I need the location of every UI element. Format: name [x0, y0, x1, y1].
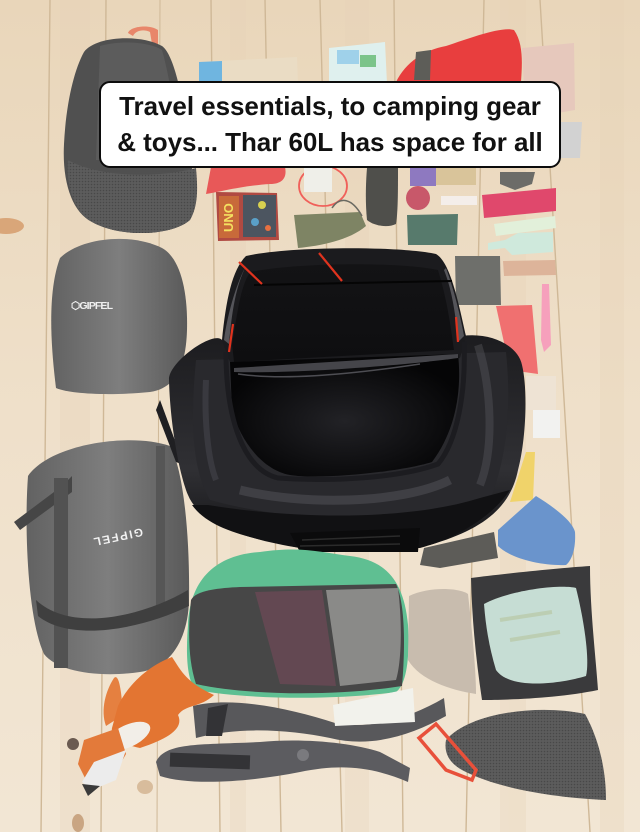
- item: carabiner: [500, 172, 535, 190]
- item: plush fox toy: [67, 657, 214, 796]
- item: green packing cube with clothes: [187, 549, 408, 698]
- item: pink pouch: [522, 43, 575, 115]
- item: upper shoulder strap: [193, 698, 446, 742]
- item: sunscreen tube: [482, 188, 556, 218]
- headline line one: Travel essentials, to camping gear: [119, 91, 541, 121]
- main duffel bag shell: [156, 248, 525, 552]
- logo: GIPFEL: GIPFEL: [92, 525, 144, 547]
- item: red dry bag: [396, 29, 522, 82]
- item: UNO card box: [216, 192, 279, 241]
- item: UNO card box: UNO: [221, 203, 236, 232]
- item: small box: [503, 260, 556, 276]
- open flap: [222, 248, 466, 368]
- logo: GIPFEL: ⬡GIPFEL: [71, 300, 114, 312]
- item: silver tin: [558, 122, 582, 158]
- item: beige pouch: [408, 589, 476, 694]
- item: toothbrush: [541, 284, 551, 352]
- item: grey stuff bag with logo: [51, 239, 187, 394]
- item: blue drawstring sack: [498, 496, 575, 565]
- item: red pouch: [206, 167, 286, 194]
- item: teal wallet: [407, 214, 458, 245]
- item: snack packets: [410, 168, 476, 186]
- item: red tin: [406, 186, 430, 210]
- item: olive pouch: [294, 200, 366, 248]
- item: dark glasses case: [366, 168, 398, 226]
- item: grey stuff sack top left: [64, 26, 197, 233]
- headline line two: & toys... Thar 60L has space for all: [117, 127, 543, 157]
- item: insulated bottle: [420, 532, 498, 568]
- item: leaflet under strap: [333, 688, 415, 726]
- item: power bank and red cable: [299, 166, 347, 206]
- item: toiletry tubes: [488, 216, 556, 255]
- headline callout: [99, 81, 561, 168]
- zip pulls, red: [229, 253, 458, 352]
- item: lower shoulder strap: [156, 740, 410, 782]
- item: grey mesh bag with orange strap: [419, 710, 606, 800]
- item: sachets: [510, 376, 560, 502]
- item: wet wipes pack: [329, 42, 387, 84]
- item: grey notebook: [455, 256, 501, 305]
- item: pink mask: [496, 305, 538, 374]
- main compartment interior: [230, 354, 459, 477]
- item: map and leaflet: [199, 57, 298, 84]
- item: mesh bag with towel: [471, 566, 598, 700]
- item: compressed sleeping bag: [14, 440, 189, 674]
- item: lip balm: [441, 196, 477, 205]
